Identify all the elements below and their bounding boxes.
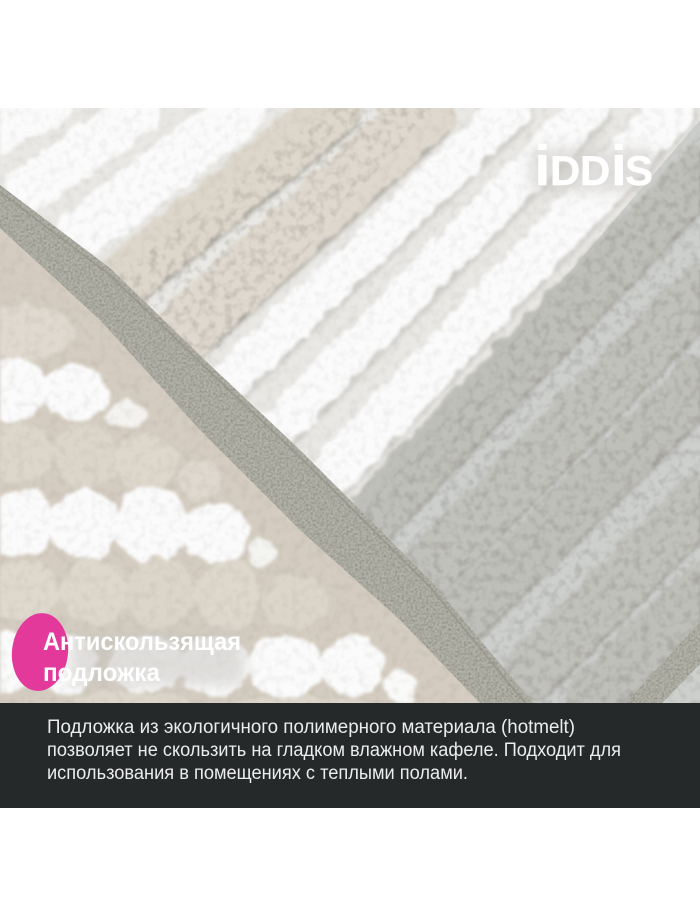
description text <box>47 717 621 784</box>
beige row 2 <box>0 422 54 482</box>
dark description band <box>0 703 700 808</box>
logo: IDDIS: ® <box>650 143 658 154</box>
white row 3 <box>0 491 56 557</box>
badge: pink ellipse <box>8 610 72 694</box>
logo: IDDIS: D <box>580 147 610 194</box>
white row 1 <box>0 358 46 422</box>
soft shading behind logo and heading <box>70 148 655 686</box>
heading: anti-slip backing <box>43 628 241 687</box>
logo: IDDIS <box>534 134 658 198</box>
logo: IDDIS: i <box>534 134 550 198</box>
beige row 0 <box>0 304 72 360</box>
description text: позволяет не скользить на гладком влажном кафеле. Подходит для <box>47 740 621 761</box>
grey woven binding <box>0 185 700 703</box>
photo: bath mat close-up <box>0 100 700 714</box>
heading: anti-slip backing: подложка <box>43 659 161 687</box>
upper mat area with diagonal chenille stripes <box>0 100 700 703</box>
lower mat area with pom-pom rows <box>0 228 480 703</box>
logo: IDDIS: i <box>611 134 627 198</box>
mat texture overlay <box>0 108 700 703</box>
white row 5 <box>0 628 26 695</box>
beige row 4 <box>0 562 60 622</box>
logo: IDDIS: S <box>625 147 653 194</box>
description text: использования в помещениях с теплыми полами. <box>47 763 468 784</box>
description text: Подложка из экологичного полимерного материала (hotmelt) <box>47 717 575 738</box>
beige row 6 <box>76 691 188 703</box>
logo: IDDIS: D <box>550 147 580 194</box>
heading: anti-slip backing: Антискользящая <box>43 628 241 656</box>
